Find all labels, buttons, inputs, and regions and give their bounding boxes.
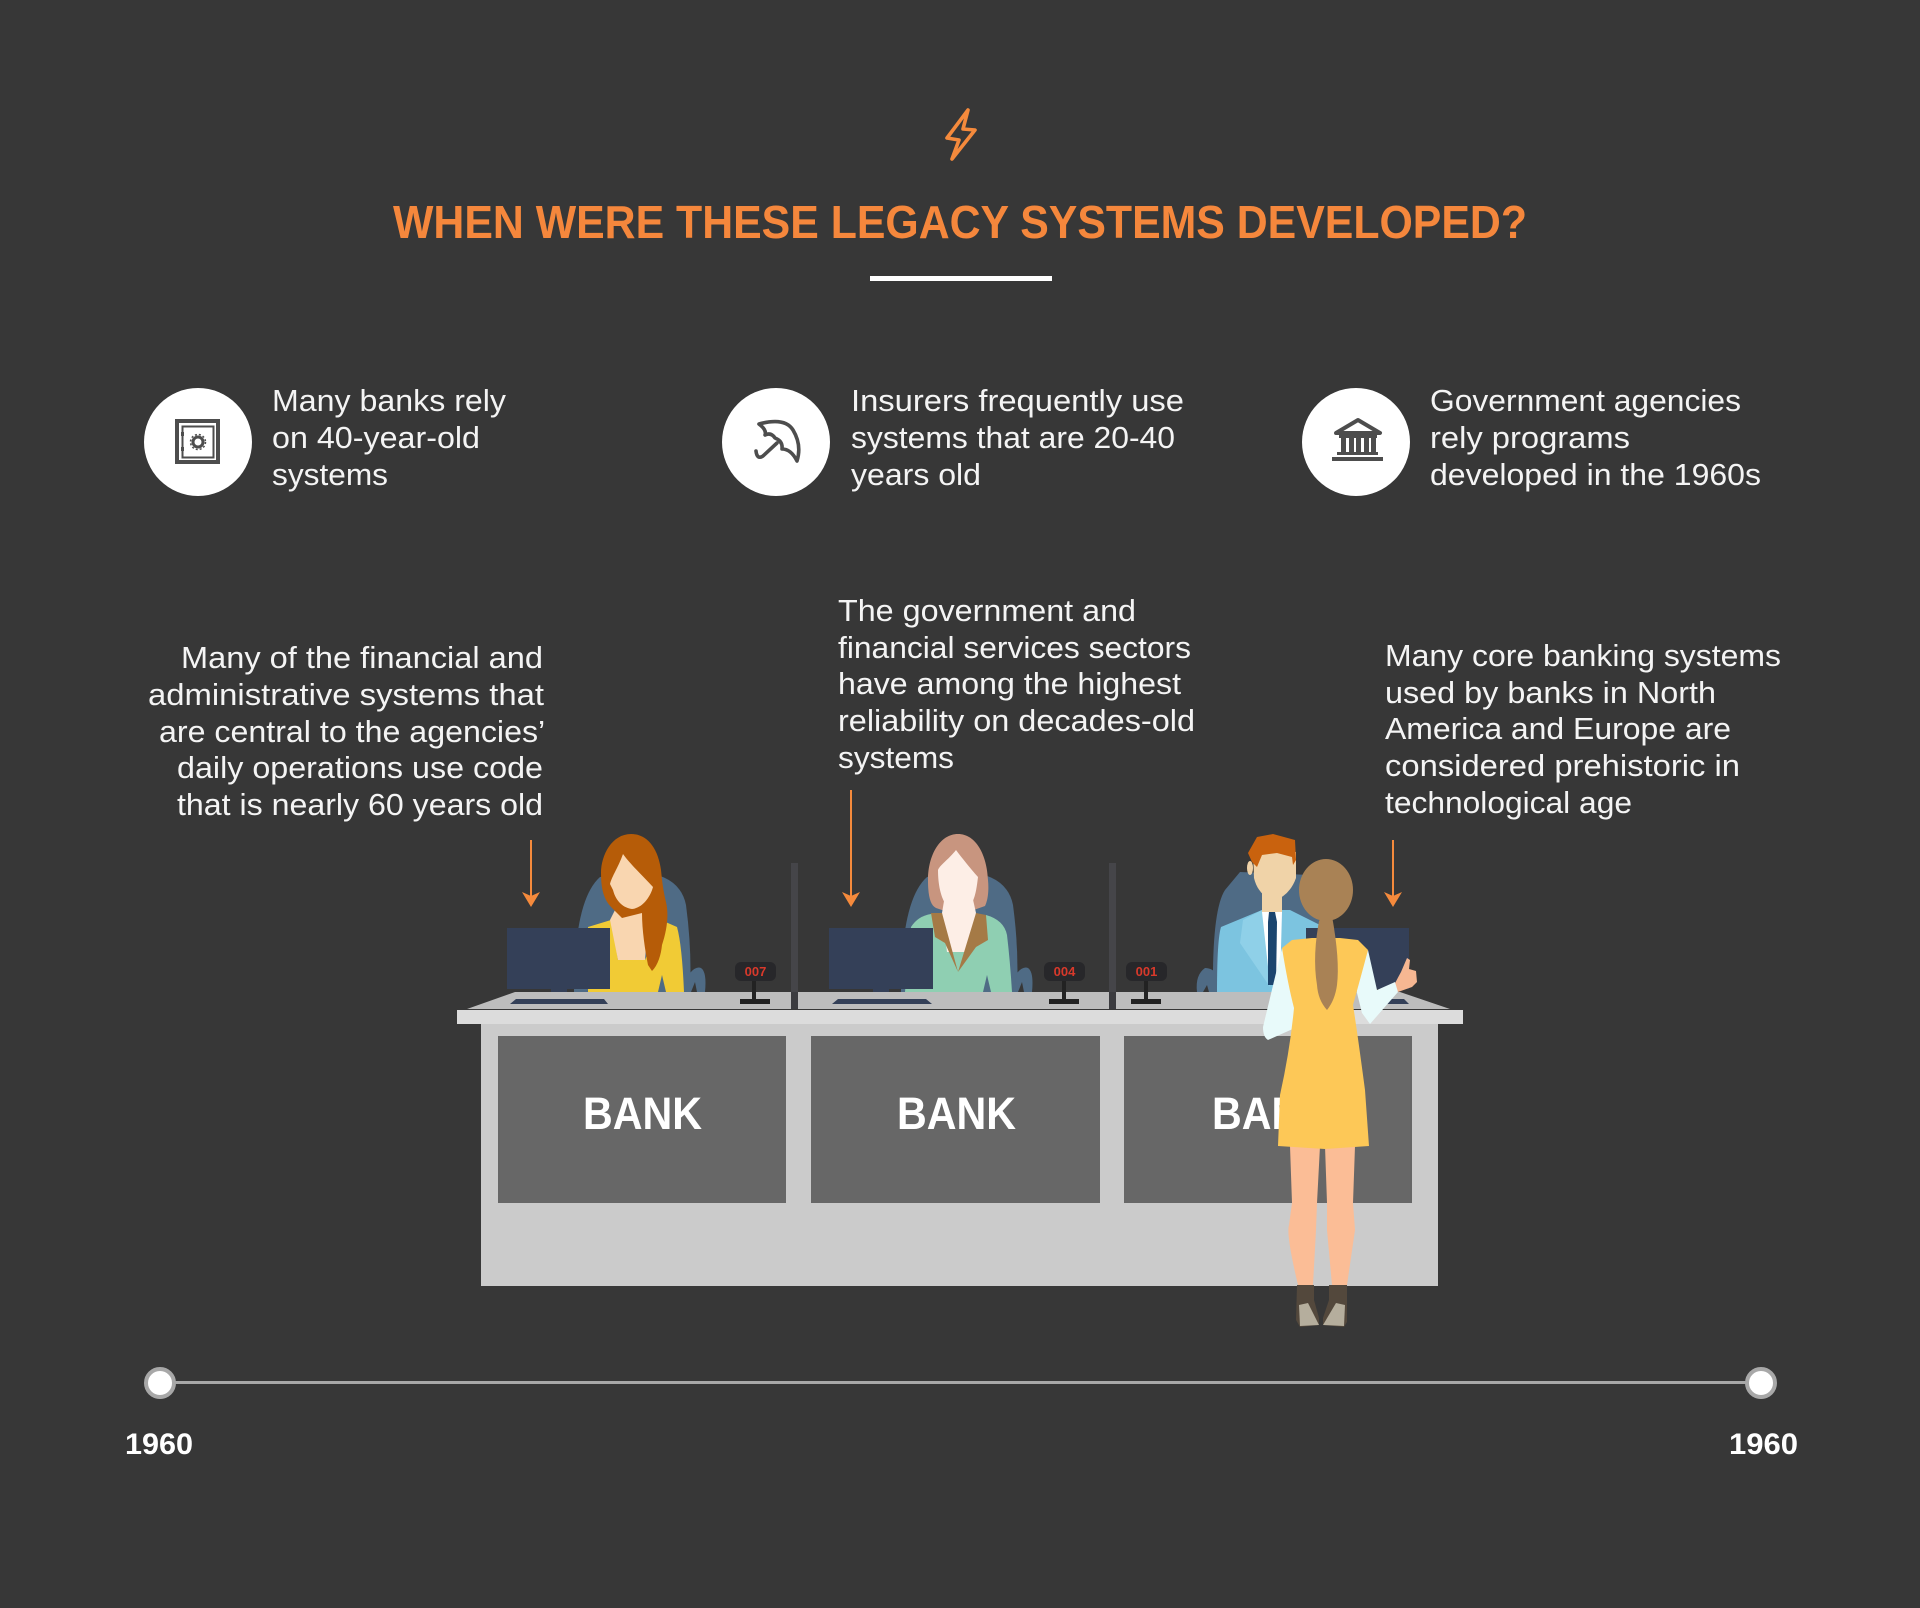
text: sectors callout: financial services sectors [838,630,1191,665]
text: sectors callout: systems [838,740,954,775]
text: core banking callout: considered prehistoric in [1385,748,1740,783]
desk panel 3 [1124,1036,1412,1203]
label: bank 3: BANK [1212,1088,1331,1139]
arrow: center callout [842,790,860,907]
label: bank 2: BANK [897,1088,1016,1139]
text: banks fact: Many banks rely [272,383,507,418]
counter sign 001 [1126,962,1167,1004]
title underline [870,276,1052,281]
label: start year: 1960 [125,1428,193,1461]
text: agencies callout: daily operations use code [177,750,543,785]
text: banks fact: systems [272,457,388,492]
counter sign 007 [735,962,776,1004]
text: sectors callout: The government and [838,593,1136,628]
text: insurers fact: systems that are 20-40 [851,420,1175,455]
timeline [125,1369,1798,1461]
shoes [1296,1285,1319,1327]
illustration: glass dividers [791,863,1116,992]
illustration: teller 3 male [1197,834,1322,992]
icon: umbrella [722,388,830,496]
text: core banking callout: technological age [1385,785,1632,820]
illustration: teller 1 with red hair [574,834,706,992]
text: agencies callout: Many of the financial and [181,640,543,675]
arrow: right callout [1384,840,1402,907]
text: agencies callout: that is nearly 60 years old [177,787,543,822]
arrow: left callout [522,840,540,907]
counter sign 001: 001 [1136,964,1157,979]
text: insurers fact: Insurers frequently use [851,383,1184,418]
illustration: monitor 1 [507,928,610,1000]
text: insurers fact: years old [851,457,981,492]
panel: government fact [1302,383,1761,496]
text: sectors callout: reliability on decades-old [838,703,1195,738]
icon: safe [144,388,252,496]
illustration: monitor 2 [829,928,933,1000]
desk panel 1 [498,1036,786,1203]
text: government fact: developed in the 1960s [1430,457,1761,492]
illustration: teller 2 with brown hair [901,834,1032,992]
counter sign 007: 007 [745,964,766,979]
text: core banking callout: Many core banking systems [1385,638,1781,673]
text: banks fact: on 40-year-old [272,420,480,455]
desk panel 2 [811,1036,1100,1203]
title: WHEN WERE THESE LEGACY SYSTEMS DEVELOPED? [393,196,1527,248]
icon: lightning bolt [947,110,975,159]
text: government fact: Government agencies [1430,383,1741,418]
counter sign 004: 004 [1054,964,1076,979]
right arm [1355,950,1398,1024]
text: core banking callout: America and Europe are [1385,711,1731,746]
illustration: bank desk [457,992,1463,1286]
icon: government building [1302,388,1410,496]
label: end year: 1960 [1729,1428,1798,1461]
right hand [1394,958,1417,992]
counter sign 004 [1044,962,1085,1004]
illustration: customer woman [1263,859,1417,1327]
panel: insurers fact [722,383,1193,496]
text: core banking callout: used by banks in North [1385,675,1716,710]
head [1299,859,1353,921]
panel: banks fact [144,383,515,496]
timeline start marker [146,1369,174,1397]
text: agencies callout: are central to the agencies’ [159,714,544,749]
legs [1288,1146,1320,1285]
left arm [1263,948,1300,1040]
text: agencies callout: administrative systems that [148,677,544,712]
dress [1278,938,1369,1149]
illustration: monitor 3 [1306,928,1409,1000]
text: government fact: rely programs [1430,420,1630,455]
ponytail [1315,916,1338,1010]
text: sectors callout: have among the highest [838,666,1181,701]
timeline end marker [1747,1369,1775,1397]
label: bank 1: BANK [583,1088,702,1139]
